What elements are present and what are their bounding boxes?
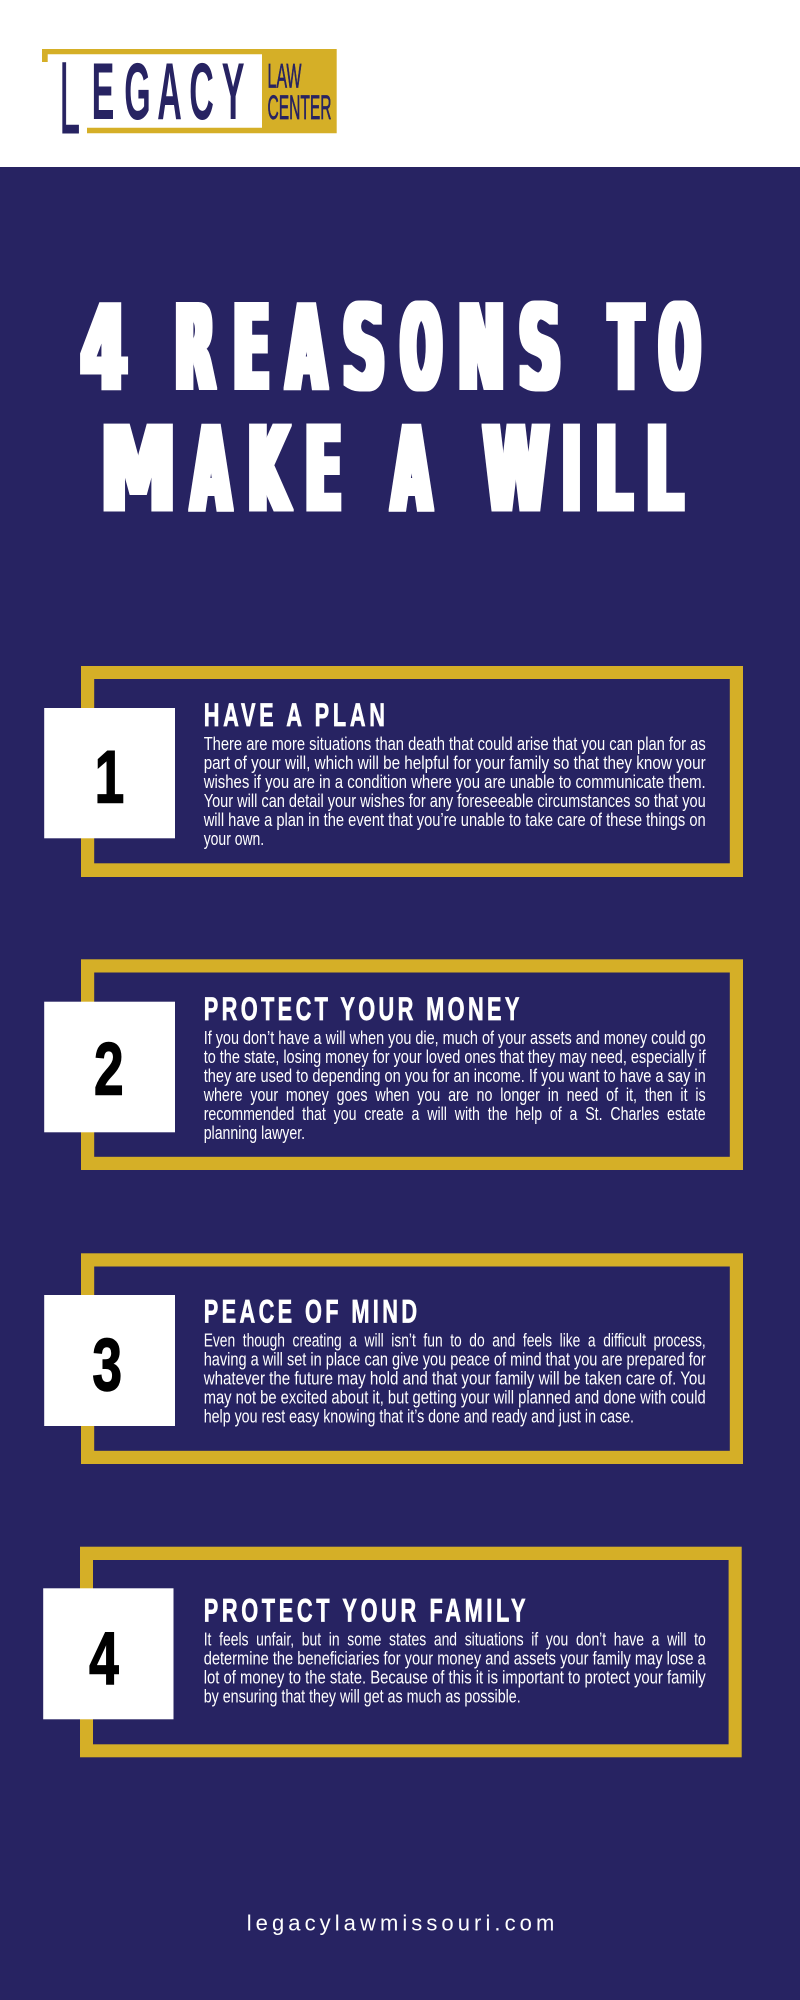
- title: E: [306, 403, 341, 540]
- title: E: [234, 281, 269, 418]
- title: K: [248, 403, 290, 540]
- heading 3: PEACE OF MIND: [204, 1293, 417, 1330]
- body text 3: [203, 1329, 706, 1426]
- title: A: [192, 403, 231, 540]
- number tile 4: [43, 1588, 174, 1719]
- panel 1: have a plan: [44, 666, 743, 877]
- body text 1: [203, 733, 706, 849]
- logo word EGACY: EGACY: [92, 47, 244, 137]
- body text 3: whatever the future may hold and that your family will be taken care of. You: [203, 1367, 706, 1388]
- title: T: [610, 281, 642, 418]
- title: A: [392, 403, 431, 540]
- title: [81, 279, 700, 540]
- number tile 3: 3: [92, 1323, 122, 1406]
- body text 1: part of your will, which will be helpful for your family so that they know your: [204, 752, 706, 773]
- panel 3: peace of mind: [44, 1253, 743, 1464]
- logo: LAW: [268, 57, 302, 95]
- body text 2: planning lawyer.: [204, 1122, 305, 1143]
- title: N: [458, 281, 504, 418]
- heading 4: PROTECT YOUR FAMILY: [204, 1592, 526, 1629]
- title: S: [519, 281, 561, 418]
- heading 2: PROTECT YOUR MONEY: [204, 991, 519, 1027]
- number tile 3: [44, 1295, 175, 1426]
- title: M: [101, 403, 176, 540]
- number tile 4: 4: [89, 1618, 119, 1700]
- logo: [42, 43, 337, 156]
- panel 2: protect your money: [44, 959, 743, 1170]
- body text 4: [204, 1628, 706, 1706]
- text: CENTER: [268, 89, 332, 127]
- number tile 2: [44, 1002, 175, 1132]
- title: W: [484, 403, 548, 540]
- header band: [0, 0, 800, 167]
- panel 4: protect your family: [43, 1547, 742, 1757]
- title: L: [596, 403, 632, 540]
- title: L: [647, 403, 682, 540]
- logo letter L: L: [60, 43, 80, 156]
- website footer: legacylawmissouri.com: [247, 1911, 554, 1936]
- body text 4: by ensuring that they will get as much as possible.: [204, 1685, 521, 1706]
- title: R: [175, 281, 214, 418]
- body text 3: help you rest easy knowing that it’s done and ready and just in case.: [204, 1405, 634, 1426]
- heading 1: HAVE A PLAN: [204, 697, 385, 733]
- title: O: [660, 281, 700, 418]
- title: 4: [81, 279, 127, 417]
- number tile 2: 2: [94, 1028, 124, 1111]
- title: A: [287, 281, 326, 418]
- number tile 1: 1: [95, 736, 124, 819]
- number tile 1: [44, 708, 175, 838]
- title: O: [401, 281, 441, 418]
- body text 1: your own.: [204, 828, 264, 849]
- title: S: [343, 281, 385, 418]
- body text 2: [203, 1027, 706, 1143]
- title: I: [563, 403, 580, 540]
